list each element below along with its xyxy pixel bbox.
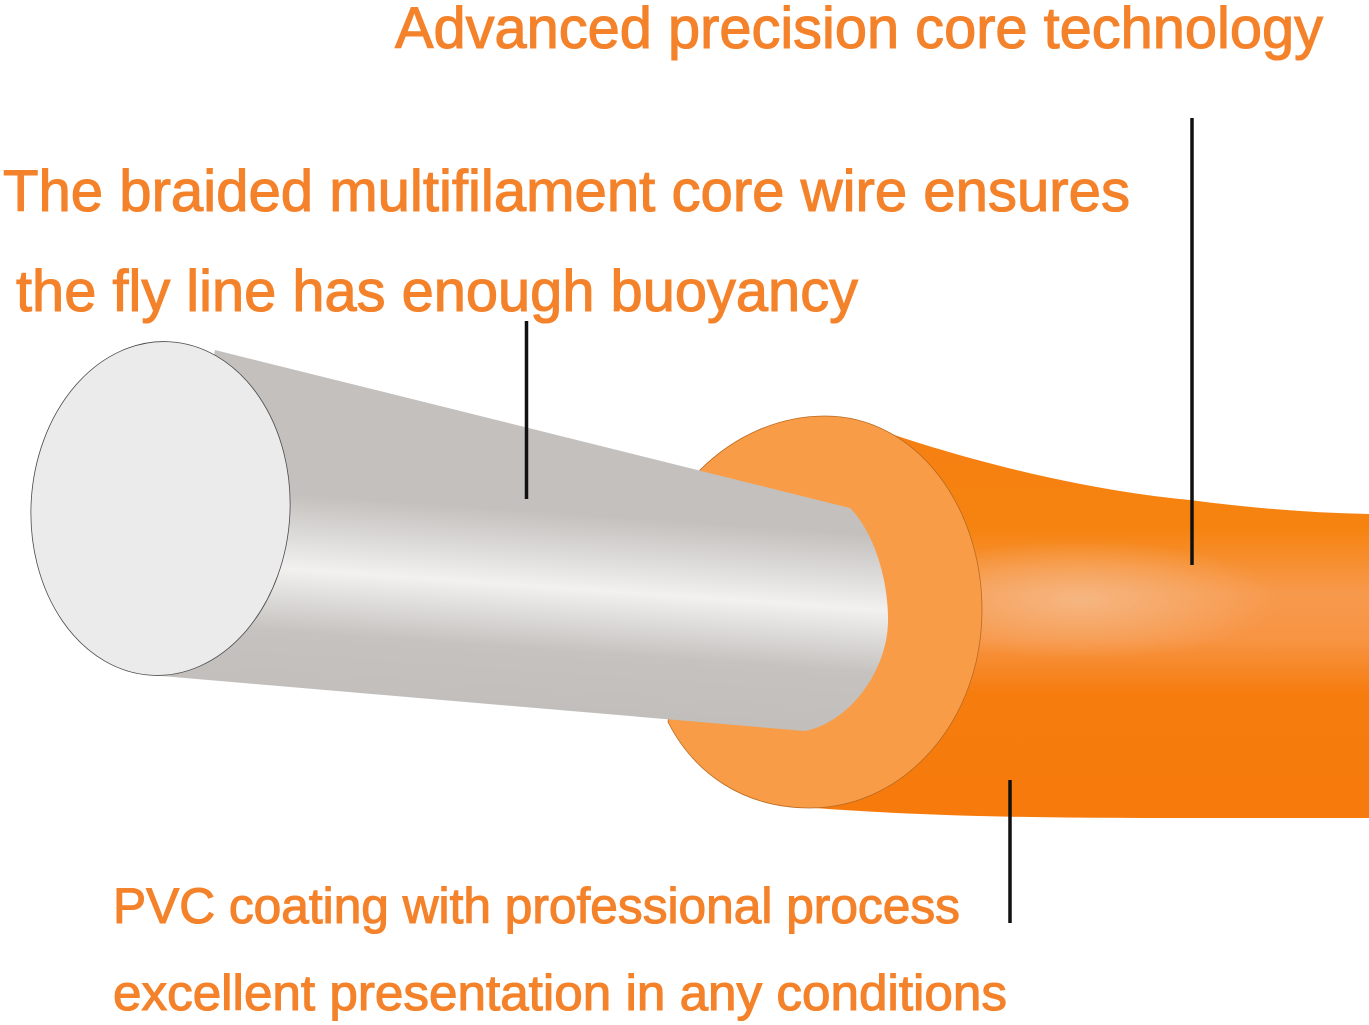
grey core wire bbox=[22, 335, 888, 731]
leader line: PVC coating bbox=[1008, 780, 1012, 923]
text: braided core description: the fly line has enough buoyancy bbox=[16, 259, 858, 324]
orange PVC coating tube bbox=[815, 430, 1369, 818]
orange coating end ring bbox=[668, 416, 982, 808]
leader line: precision core bbox=[1190, 118, 1194, 565]
text: PVC coating description: excellent presentation in any conditions bbox=[113, 965, 1007, 1021]
text: braided core description: The braided multifilament core wire ensures bbox=[3, 159, 1130, 224]
text: PVC coating description bbox=[113, 878, 1007, 1021]
text: braided core description bbox=[3, 159, 1130, 324]
leader line: core wire bbox=[525, 321, 528, 499]
core wire end cap bbox=[22, 335, 299, 682]
text: PVC coating description: PVC coating with professional process bbox=[113, 878, 960, 934]
